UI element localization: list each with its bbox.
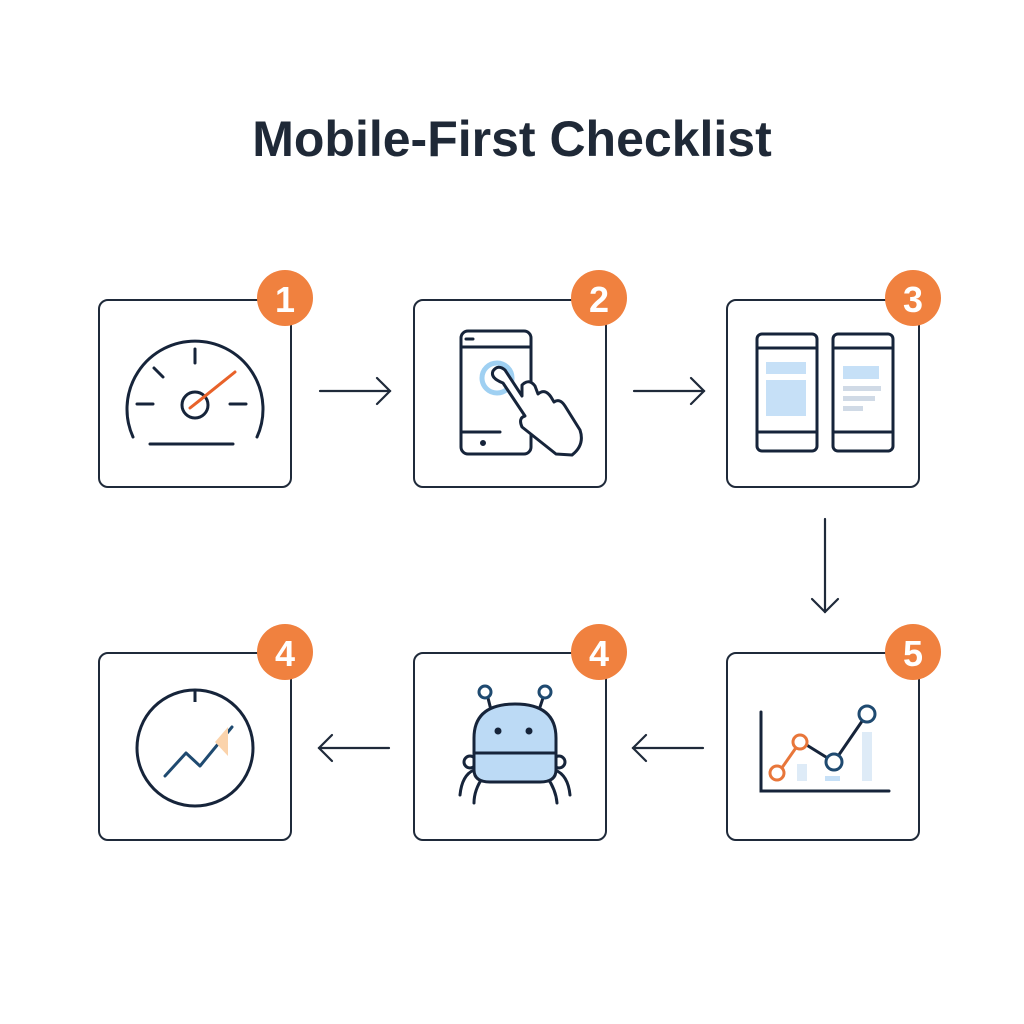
arrow 5 to 4b [633, 735, 703, 761]
badge 4 [571, 624, 627, 680]
badge 4: 4 [589, 633, 609, 674]
title: Mobile-First Checklist [252, 111, 772, 167]
panel: step 5 analytics chart [727, 624, 941, 840]
badge 1 [257, 270, 313, 326]
icon: bot [460, 698, 570, 803]
icon: two phones [757, 334, 893, 451]
panel: step 1 speed gauge [99, 270, 313, 487]
panel: step 4 crawler bot [414, 624, 627, 840]
icon: dial with trend line [137, 690, 253, 806]
panel: step 3 responsive layouts [727, 270, 941, 487]
panel: step 2 touch [414, 270, 627, 487]
icon: gauge [127, 341, 263, 444]
badge 4 [257, 624, 313, 680]
icon: line chart [797, 764, 807, 781]
arrow 3 down to 5 [812, 519, 838, 612]
badge 1: 1 [275, 279, 295, 320]
badge 3: 3 [903, 279, 923, 320]
badge 2 [571, 270, 627, 326]
badge 5: 5 [903, 633, 923, 674]
badge 3 [885, 270, 941, 326]
badge 2: 2 [589, 279, 609, 320]
badge 4: 4 [275, 633, 295, 674]
arrow 4b to 4a [319, 735, 389, 761]
icon: phone with tapping hand [461, 331, 531, 454]
arrow 1 to 2 [320, 378, 390, 404]
panel: step 4 performance dial [99, 624, 313, 840]
badge 5 [885, 624, 941, 680]
arrow 2 to 3 [634, 378, 704, 404]
